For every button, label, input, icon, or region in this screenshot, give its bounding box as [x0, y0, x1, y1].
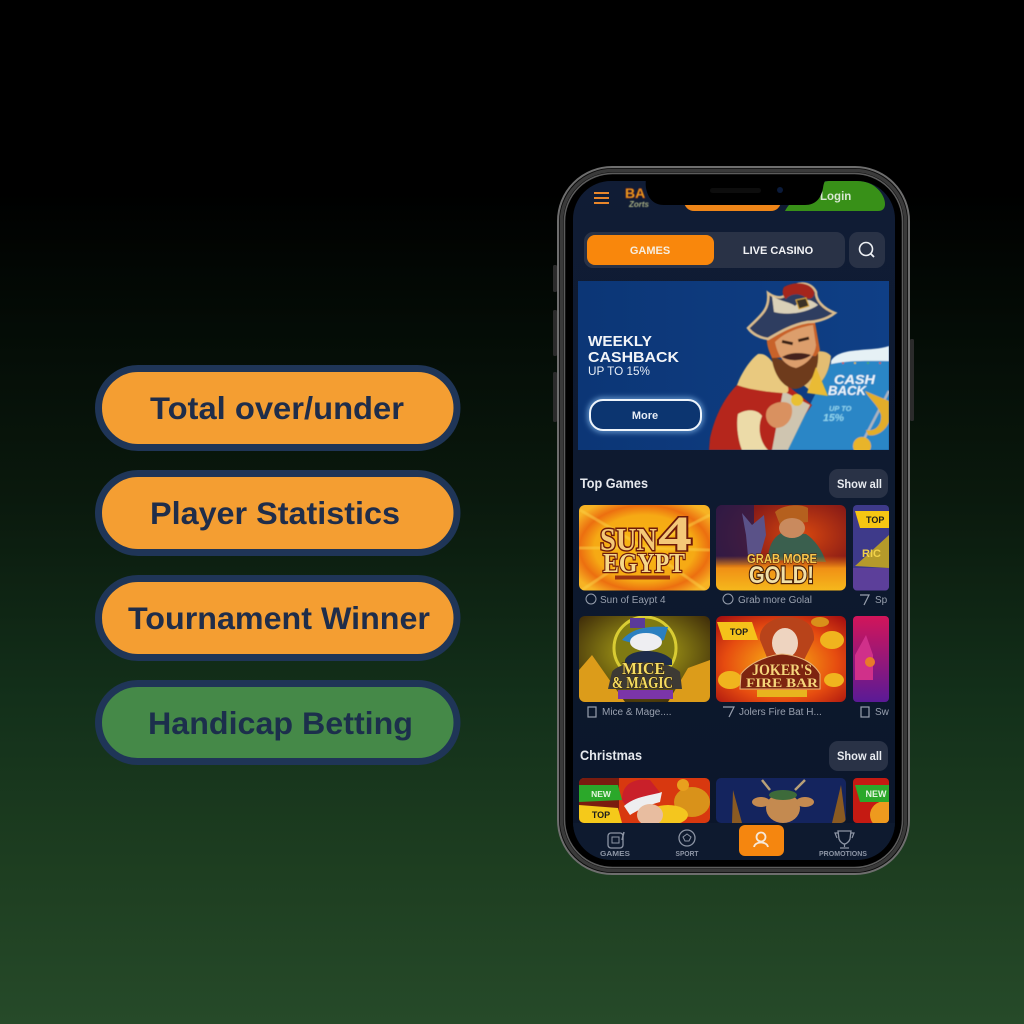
login button: [785, 181, 885, 211]
nav item: sport: SPORT: [676, 851, 699, 858]
game card: Christmas jester: NEW: [591, 789, 612, 799]
game card: Joker's Fire Bar: [716, 616, 846, 718]
illustration: pirate: [709, 283, 835, 450]
phone notch: [644, 178, 830, 205]
option pill: Handicap Betting: [98, 684, 457, 762]
logo: Zorts: [628, 200, 650, 209]
search button: [849, 232, 885, 268]
phone frame: [553, 167, 914, 874]
hand and coin: [766, 402, 792, 428]
promo banner: [578, 281, 889, 455]
section heading: Top Games: [580, 469, 888, 498]
game card: Mice & Magic: & MAGIC: [612, 673, 673, 692]
section heading: Top Games: Top Games: [580, 476, 648, 491]
header register button: [684, 205, 780, 211]
option pill: Handicap Betting: Handicap Betting: [148, 705, 413, 741]
game card: Christmas jester: [579, 778, 710, 826]
game card: Mice & Magic: MICE: [622, 659, 665, 678]
game card: Sun of Egypt 4: [579, 505, 710, 606]
logo: BA: [625, 185, 645, 201]
game card: Joker's Fire Bar: Jolers Fire Bat H...: [739, 707, 822, 718]
bottom navigation: [573, 823, 895, 860]
game card: Christmas reindeer: [716, 778, 846, 823]
hair: [767, 322, 820, 358]
game card: Mice & Magic: [579, 616, 710, 718]
promo banner: UP TO 15%: [588, 364, 650, 378]
game card: Sp (partial): RIC: [862, 548, 881, 560]
nav item: sport: [676, 830, 699, 858]
promo banner: WEEKLY: [588, 333, 652, 350]
logo: [624, 188, 650, 208]
section heading: Christmas: [580, 741, 888, 771]
section heading: Top Games: Show all: [837, 479, 882, 491]
game card: Sp (partial): Sp: [875, 595, 888, 606]
game card: Joker's Fire Bar: TOP: [730, 627, 748, 637]
more button: [590, 400, 701, 430]
illustration: cashback card: CASH: [834, 373, 876, 387]
game card: Grab more Gold: [716, 505, 846, 606]
game card: Sp (partial): TOP: [866, 515, 884, 525]
section heading: Christmas: Christmas: [580, 748, 642, 763]
game card: Christmas jester: TOP: [592, 810, 610, 820]
menu icon: [594, 192, 609, 204]
game card: Sw (partial): Sw: [875, 707, 890, 718]
option pill: Total over/under: [98, 368, 457, 448]
nav item: profile: [739, 825, 784, 856]
game card: Sp (partial): [853, 505, 889, 606]
illustration: cashback card: 15%: [823, 412, 845, 424]
nav item: games: GAMES: [600, 851, 630, 858]
section heading: Christmas: Show all: [837, 751, 882, 763]
promo banner: CASHBACK: [588, 349, 679, 366]
login button: Login: [820, 191, 851, 203]
game card: Joker's Fire Bar: FIRE BAR: [746, 675, 819, 690]
tricorn hat: [748, 283, 835, 339]
option pill: Tournament Winner: Tournament Winner: [128, 600, 430, 636]
game card: Sun of Egypt 4: EGYPT: [603, 548, 685, 578]
phone mockup: [553, 167, 914, 874]
illustration: cashback card: BACK: [828, 384, 867, 398]
tab bar: LIVE CASINO: [743, 245, 814, 257]
tab bar: [584, 232, 845, 268]
illustration: cashback card: UP TO: [829, 404, 852, 413]
fur collar: [737, 354, 788, 393]
game card: Grab more Gold: GOLD!: [749, 562, 814, 589]
coat: [709, 385, 812, 450]
tab bar: GAMES: [630, 245, 670, 257]
game card: Grab more Gold: Grab more Golal: [738, 595, 812, 606]
game card: Sun of Egypt 4: Sun of Eaypt 4: [600, 595, 666, 606]
illustration: cashback card: [787, 346, 889, 455]
game card: Sw (partial): [853, 616, 890, 718]
game card: Joker's Fire Bar: JOKER'S: [752, 662, 812, 679]
game card: Mice & Magic: Mice & Mage....: [602, 707, 671, 718]
nav item: promotions: PROMOTIONS: [819, 851, 867, 858]
game card: Sun of Egypt 4: 4: [658, 505, 692, 561]
game card: Christmas partial: NEW: [866, 789, 887, 799]
option pill: Total over/under: Total over/under: [150, 390, 404, 426]
face: [775, 325, 816, 368]
option pill: Tournament Winner: [98, 578, 457, 658]
phone screen: [573, 181, 900, 860]
game card: Grab more Gold: GRAB MORE: [747, 551, 817, 566]
beard: [771, 352, 818, 389]
game card: Christmas partial: [853, 778, 889, 823]
game card: Sun of Egypt 4: SUN: [600, 521, 657, 557]
nav item: promotions: [819, 831, 867, 858]
option pill: Player Statistics: [98, 474, 457, 552]
more button: More: [632, 410, 658, 422]
nav item: games: [600, 832, 630, 858]
option pill: Player Statistics: Player Statistics: [150, 495, 400, 531]
